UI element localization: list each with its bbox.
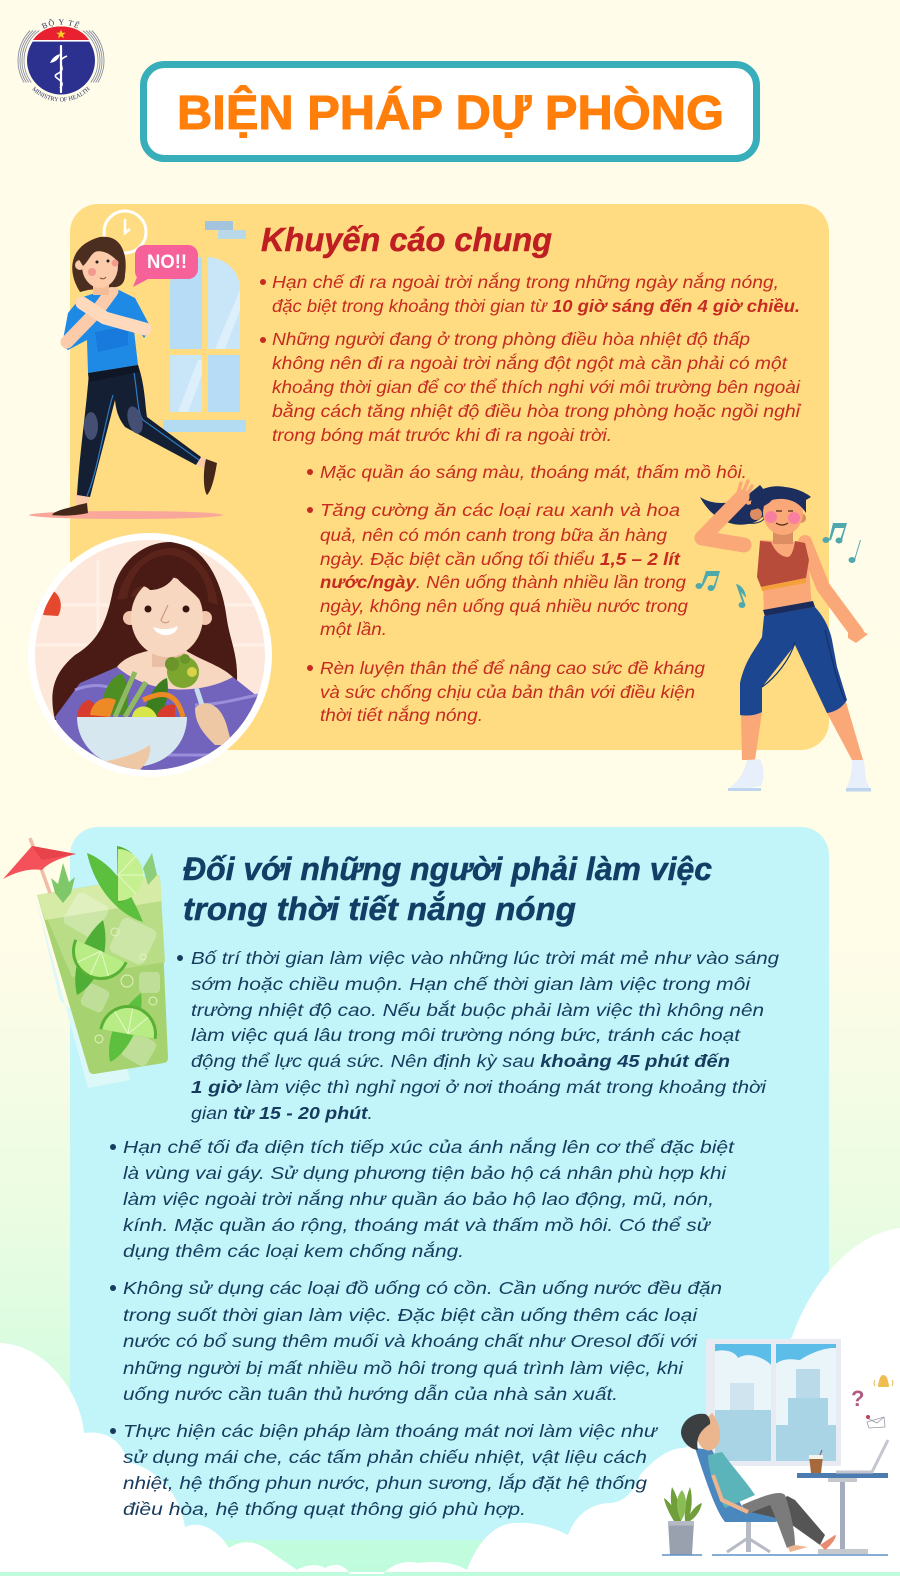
text block: phòng điều hòa: Những người đang ở trong phòng điều hòa nhiệt độ thấp bbox=[272, 329, 750, 349]
text block: đồ uống: những người bị mất nhiều mồ hôi trong quá trình làm việc, khi bbox=[123, 1358, 684, 1378]
text block: thời gian làm việc bbox=[177, 948, 779, 1123]
logo: Bộ Y Tế: BỘ Y TẾ bbox=[41, 18, 80, 29]
logo: Bộ Y Tế: MINISTRY OF HEALTH bbox=[32, 86, 90, 102]
text block: thời gian làm việc: làm việc quá lâu trong môi trường nóng bức, tránh các hoạt bbox=[191, 1025, 741, 1045]
text block: phòng điều hòa bbox=[260, 329, 802, 445]
text block: ăn uống: ngày, không nên uống quá nhiều nước trong bbox=[320, 596, 688, 616]
text block: tiếp xúc ánh nắng: Hạn chế tối đa diện tích tiếp xúc của ánh nắng lên cơ thể đặc biệt bbox=[123, 1137, 735, 1157]
text block: phòng điều hòa: không nên đi ra ngoài trời nắng đột ngột mà cần phải có một bbox=[272, 353, 788, 373]
text block: rèn luyện: thời tiết nắng nóng. bbox=[320, 705, 483, 725]
title bbox=[144, 64, 756, 158]
text block: rèn luyện bbox=[307, 658, 705, 725]
text block: đồ uống: Không sử dụng các loại đồ uống có cồn. Cần uống nước đều đặn bbox=[123, 1278, 722, 1298]
text block: đồ uống: trong suốt thời gian làm việc. Đặc biệt cần uống thêm các loại bbox=[123, 1305, 698, 1325]
text block: tiếp xúc ánh nắng: dụng thêm các loại kem chống nắng. bbox=[123, 1241, 464, 1261]
text block: rèn luyện: và sức chống chịu của bản thân với điều kiện bbox=[320, 682, 695, 702]
text block: tiếp xúc ánh nắng bbox=[110, 1137, 735, 1261]
text block: phòng điều hòa: khoảng thời gian để cơ thể thích nghi với môi trường bên ngoài bbox=[272, 377, 801, 397]
text block: thời gian làm việc: sớm hoặc chiều muộn. Hạn chế thời gian làm việc trong môi bbox=[191, 974, 751, 994]
title: BIỆN PHÁP DỰ PHÒNG bbox=[177, 85, 724, 140]
text block: giờ nắng: Hạn chế đi ra ngoài trời nắng trong những ngày nắng nóng, bbox=[272, 272, 779, 292]
text block: đồ uống: nước có bổ sung thêm muối và khoáng chất như Oresol đối với bbox=[123, 1331, 698, 1351]
illustration: man resting by window: ? bbox=[851, 1386, 864, 1411]
text block: đồ uống bbox=[110, 1278, 722, 1404]
text block: thời gian làm việc: 1 giờ làm việc thì nghỉ ngơi ở nơi thoáng mát trong khoảng thời bbox=[191, 1077, 767, 1097]
text block: ăn uống: ngày. Đặc biệt cần uống tối thiểu 1,5 – 2 lít bbox=[320, 549, 681, 569]
illustration: clock and window bbox=[104, 211, 246, 432]
text block: ăn uống: nước/ngày . Nên uống thành nhiều lần trong bbox=[320, 572, 686, 592]
text block: giờ nắng: đặc biệt trong khoảng thời gian từ 10 giờ sáng đến 4 giờ chiều. bbox=[272, 296, 800, 316]
panel background: làm việc trong thời tiết nắng nóng bbox=[70, 827, 829, 1540]
clouds bbox=[0, 1228, 900, 1574]
text block: phòng điều hòa: bằng cách tăng nhiệt độ điều hòa trong phòng hoặc ngồi nghỉ bbox=[272, 401, 802, 421]
heading: Đối với những người phải làm việc bbox=[183, 851, 712, 887]
text block: thời gian làm việc: Bố trí thời gian làm việc vào những lúc trời mát mẻ như vào sáng bbox=[191, 948, 779, 968]
speech bubble: NO!!: NO!! bbox=[147, 252, 187, 273]
icon: cocktail umbrella bbox=[3, 838, 76, 893]
text block: ăn uống bbox=[307, 500, 688, 639]
illustration: dancing woman bbox=[700, 481, 871, 792]
panel: Khuyến cáo chung bbox=[70, 204, 829, 750]
text block: ăn uống: một lần. bbox=[320, 619, 387, 639]
text block: tiếp xúc ánh nắng: là vùng vai gáy. Sử dụng phương tiện bảo hộ cá nhân phù hợp khi bbox=[123, 1163, 727, 1183]
text block: giờ nắng bbox=[260, 272, 800, 316]
text block: tiếp xúc ánh nắng: làm việc ngoài trời nắng như quần áo bảo hộ lao động, mũ, nón, bbox=[123, 1189, 714, 1209]
text block: ăn uống: quả, nên có món canh trong bữa ăn hàng bbox=[320, 525, 667, 545]
heading: Khuyến cáo chung bbox=[261, 221, 552, 258]
text block: tiếp xúc ánh nắng: kính. Mặc quần áo rộng, thoáng mát và thấm mồ hôi. Có thể sử bbox=[123, 1215, 712, 1235]
illustration: man resting by window bbox=[662, 1339, 893, 1555]
text block: nơi làm việc: điều hòa, hệ thống quạt thông gió phù hợp. bbox=[123, 1499, 526, 1519]
text block: đồ uống: uống nước cần tuân thủ hướng dẫn của nhà sản xuất. bbox=[123, 1384, 618, 1404]
speech bubble: NO!! bbox=[133, 245, 198, 287]
text block: rèn luyện: Rèn luyện thân thể để nâng cao sức đề kháng bbox=[320, 658, 705, 678]
text block: thời gian làm việc: gian từ 15 - 20 phút . bbox=[191, 1103, 373, 1123]
text block: ăn uống: Tăng cường ăn các loại rau xanh và hoa bbox=[320, 500, 680, 520]
logo: Bộ Y Tế bbox=[18, 18, 104, 102]
illustration: mojito glass bbox=[35, 846, 168, 1088]
icon: music notes bbox=[696, 523, 861, 608]
text block: thời gian làm việc: trường nhiệt độ cao. Nếu bắt buộc phải làm việc thì không nên bbox=[191, 1000, 764, 1020]
illustration: woman saying no bbox=[29, 237, 223, 519]
illustration: woman eating salad bbox=[28, 533, 272, 777]
text block: phòng điều hòa: trong bóng mát trước khi đi ra ngoài trời. bbox=[272, 425, 612, 445]
text block: nơi làm việc: sử dụng mái che, các tấm phản chiếu nhiệt, vật liệu cách bbox=[123, 1447, 647, 1467]
text block: thời gian làm việc: động thể lực quá sức. Nên định kỳ sau khoảng 45 phút đến bbox=[191, 1051, 730, 1071]
text block: nơi làm việc: Thực hiện các biện pháp làm thoáng mát nơi làm việc như bbox=[123, 1421, 659, 1441]
text block: quần áo: Mặc quần áo sáng màu, thoáng mát, thấm mồ hôi. bbox=[320, 462, 747, 482]
text block: nơi làm việc: nhiệt, hệ thống phun nước, phun sương, lắp đặt hệ thống bbox=[123, 1473, 647, 1493]
heading line 2: trong thời tiết nắng nóng bbox=[183, 891, 576, 927]
text block: nơi làm việc bbox=[110, 1421, 659, 1519]
